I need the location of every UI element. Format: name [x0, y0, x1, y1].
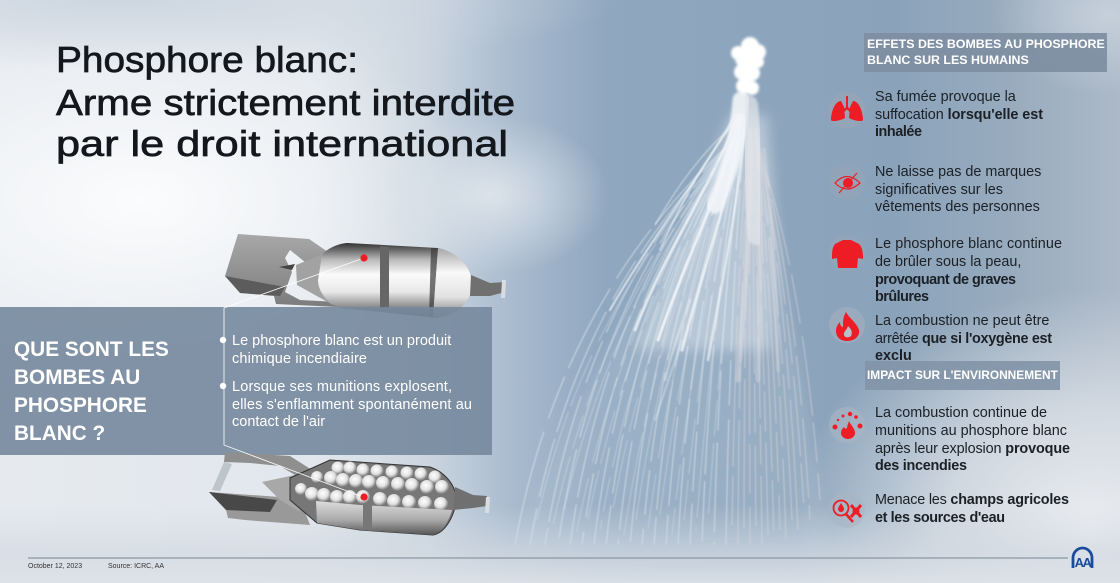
footer: Source: ICRC, AA — [108, 563, 164, 570]
panel heading: BOMBES AU — [14, 366, 140, 389]
panel heading — [14, 338, 169, 445]
panel heading: BLANC ? — [14, 422, 105, 445]
bomb nose — [433, 248, 472, 318]
text: vêtements: Ne laisse pas de marques — [875, 164, 1041, 180]
text: incendies: munitions au phosphore blanc — [875, 423, 1067, 439]
text: combustion: exclu — [875, 348, 912, 364]
text: combustion: La combustion ne peut être — [875, 313, 1049, 329]
cutaway shell — [290, 460, 456, 535]
cutaway spheres — [295, 462, 449, 511]
plume upper streaks — [610, 115, 745, 420]
icon: torso — [829, 235, 865, 271]
icon: lungs — [829, 92, 865, 128]
text: brûler: provoquant de graves — [875, 272, 1016, 288]
header: impact — [865, 361, 1060, 390]
smoke head — [731, 37, 766, 95]
text: incendies — [875, 405, 1070, 474]
header: impact: IMPACT SUR L'ENVIRONNEMENT — [867, 368, 1059, 382]
text: vêtements — [875, 164, 1041, 215]
icon: fires — [829, 407, 865, 443]
title: Phosphore blanc: — [56, 39, 358, 80]
cutaway lower hull — [316, 501, 452, 535]
panel heading: QUE SONT LES — [14, 338, 169, 361]
illustration: intact bomb — [225, 234, 506, 318]
text: fumée: inhalée — [875, 124, 922, 140]
header: effets: EFFETS DES BOMBES AU PHOSPHORE — [867, 37, 1105, 51]
header: effets: BLANC SUR LES HUMAINS — [867, 53, 1029, 67]
plume fine streaks — [515, 130, 820, 545]
title: par le droit international — [56, 123, 508, 164]
icon: flame — [829, 307, 865, 343]
plume haze — [505, 100, 830, 570]
footer — [28, 548, 1092, 570]
photo: white phosphorus plume — [505, 37, 830, 570]
text: brûler: brûlures — [875, 289, 929, 305]
text: champs: et les sources d'eau — [875, 510, 1005, 526]
leader lines and red markers — [224, 254, 368, 501]
cutaway tail fins — [209, 452, 312, 525]
panel: effets sur les humains — [829, 33, 1107, 364]
panel bullet list: elles s'enflamment spontanément au — [232, 397, 472, 413]
text: brûler: de brûler sous la peau, — [875, 254, 1021, 270]
panel: que sont les bombes — [0, 307, 492, 455]
panel bullet list: Le phosphore blanc est un produit — [232, 333, 451, 349]
text: vêtements: vêtements des personnes — [875, 199, 1040, 215]
text: incendies: La combustion continue de — [875, 405, 1047, 421]
icon: magnifier with water and crop — [829, 492, 865, 528]
cutaway fuse — [453, 487, 487, 510]
panel bullet list: contact de l'air — [232, 414, 325, 430]
text: champs: Menace les champs agricoles — [875, 492, 1069, 508]
panel bullet list — [220, 333, 472, 430]
panel bullet list: Lorsque ses munitions explosent, — [232, 379, 452, 395]
text: combustion: arrêtée que si l'oxygène est — [875, 331, 1052, 347]
text: combustion — [875, 313, 1052, 364]
panel bullet list: chimique incendiaire — [232, 351, 367, 367]
footer: October 12, 2023 — [28, 563, 82, 570]
bomb body — [318, 243, 438, 318]
title: Arme strictement interdite — [56, 82, 515, 123]
logo: AA: AA — [1075, 555, 1092, 570]
ground haze — [0, 505, 1120, 583]
logo: AA — [1073, 548, 1092, 570]
icon: crossed eye — [829, 164, 865, 200]
bomb tail fins — [225, 234, 338, 307]
text: fumée: suffocation lorsqu'elle est — [875, 107, 1043, 123]
header: effets — [864, 33, 1107, 72]
text: fumée — [875, 89, 1043, 140]
text: incendies: des incendies — [875, 458, 967, 474]
plume column — [715, 100, 741, 205]
text: brûler: Le phosphore blanc continue — [875, 236, 1062, 252]
panel heading: PHOSPHORE — [14, 394, 147, 417]
text: incendies: après leur explosion provoque — [875, 441, 1070, 457]
illustration: cutaway bomb — [209, 452, 490, 535]
panel: impact sur l'environnement — [829, 361, 1070, 528]
text: fumée: Sa fumée provoque la — [875, 89, 1016, 105]
title — [56, 39, 515, 164]
text: brûler — [875, 236, 1062, 305]
text: vêtements: significatives sur les — [875, 182, 1003, 198]
text: champs — [875, 492, 1069, 526]
